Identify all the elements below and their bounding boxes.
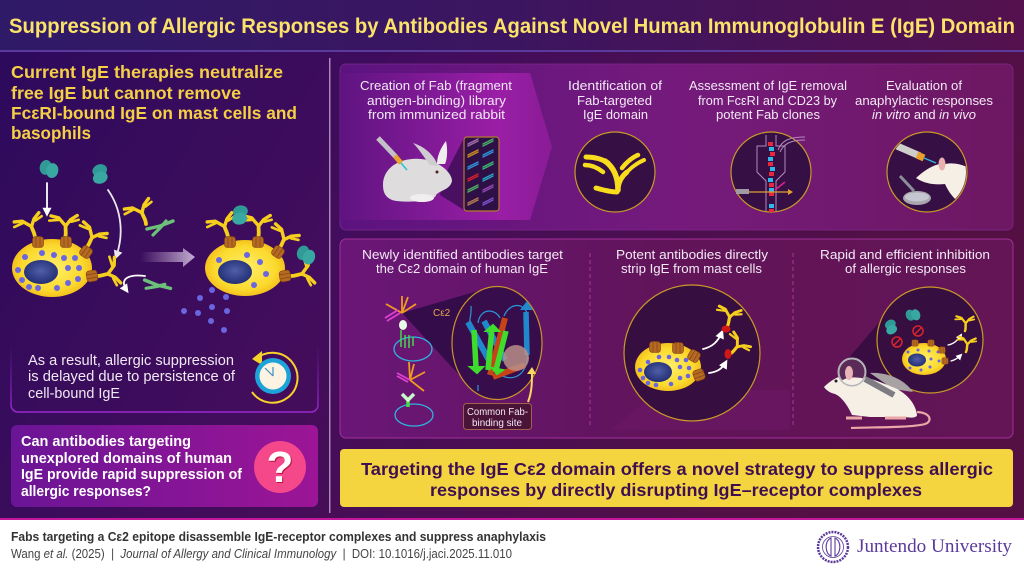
circle: inhibited response: [877, 287, 983, 393]
question text: unexplored domains of human: [21, 450, 232, 467]
heading: [616, 248, 769, 276]
step 1 text: from immunized rabbit: [368, 108, 506, 122]
panel: mechanisms: [340, 239, 1013, 438]
cone to library: [440, 138, 464, 210]
citation title: Fabs targeting a Cε2 epitope disassemble IgE-receptor complexes and suppress anaphylaxis: [11, 530, 546, 544]
free IgE with therapeutic antibody: [122, 198, 173, 235]
conclusion banner: Targeting the IgE Cε2 domain offers a novel strategy to suppress allergic: [361, 459, 993, 479]
logo: Juntendo University: Juntendo University: [857, 537, 1013, 557]
question text: [21, 433, 243, 500]
icon: mouse with magnifier: [824, 358, 930, 428]
step 2 text: [568, 79, 663, 122]
left heading: current therapies: free IgE but cannot remove: [11, 83, 241, 103]
left heading: current therapies: basophils: [11, 123, 91, 143]
icon: rabbit: [383, 141, 452, 202]
icon: question mark: [254, 441, 306, 493]
icon: IgE domain: [575, 132, 655, 212]
logo: Juntendo University: [818, 532, 1013, 562]
step 3: assessment: [689, 79, 847, 212]
result text: [28, 353, 236, 402]
icon: clock: [252, 351, 298, 403]
arrow: deflected: [124, 276, 145, 291]
conclusion banner: responses by directly disrupting IgE–receptor complexes: [430, 480, 922, 500]
step 2: identify domain: [568, 79, 663, 212]
heading: Potent antibodies directly: [616, 248, 769, 262]
step 1: Fab library: [360, 79, 513, 211]
callout: common Fab-binding site: [464, 404, 532, 430]
label: Cε2: Cε2: [433, 308, 451, 319]
diagram: mast cell before and after allergen exposure: [12, 159, 318, 333]
icon: antibody and receptor top: [385, 296, 432, 361]
icon: allergens: [38, 159, 111, 186]
conclusion banner: [340, 449, 1013, 507]
step 2 text: IgE domain: [583, 108, 648, 122]
icon: flow cell: [731, 132, 811, 212]
result text: cell-bound IgE: [28, 386, 120, 402]
column: Cε2 target: [362, 248, 564, 430]
question text: allergic responses?: [21, 483, 151, 500]
callout: common Fab-binding site: binding site: [472, 418, 522, 429]
step 1 text: [360, 79, 513, 122]
arrow: allergen misses: [108, 190, 121, 257]
library box: [464, 137, 499, 211]
column: stripping: [616, 248, 769, 421]
icon: mouse and dish: [887, 132, 970, 212]
result text: As a result, allergic suppression: [28, 353, 234, 369]
icon: question mark: ?: [267, 443, 293, 492]
panel: workflow steps: [340, 64, 1013, 230]
heading: of allergic responses: [845, 262, 966, 276]
therapeutic antibody free: [141, 273, 171, 300]
step 3 text: Assessment of IgE removal: [689, 79, 847, 93]
heading: [362, 248, 564, 276]
arrow: Fab site: [528, 372, 532, 402]
question box: [11, 425, 318, 507]
footer: [0, 518, 1024, 576]
result text: is delayed due to persistence of: [28, 369, 236, 385]
left heading: current therapies: [11, 62, 297, 143]
step 4: evaluation: [855, 79, 993, 212]
citation: Wang et al. (2025) | Journal of Allergy and Clinical Immunology | DOI: 10.1016/j.jaci.2025.11.010: [11, 547, 512, 561]
heading: Newly identified antibodies target: [362, 248, 564, 262]
step 4 text: anaphylactic responses: [855, 94, 993, 108]
chevron background: [340, 73, 552, 220]
step 2 text: Identification of: [568, 79, 663, 93]
step 3 text: [689, 79, 847, 122]
zoom cone: [840, 318, 925, 390]
question text: Can antibodies targeting: [21, 433, 191, 450]
step 1 text: Creation of Fab (fragment: [360, 79, 513, 93]
step 1 text: antigen-binding) library: [367, 94, 507, 108]
question text: IgE provide rapid suppression of: [21, 466, 243, 483]
arrow: allergen to IgE: [46, 183, 48, 214]
icon: antibody and receptor bottom: [395, 362, 433, 426]
step 3 text: potent Fab clones: [716, 108, 820, 122]
heading: [820, 248, 990, 276]
step 3 text: from FcεRI and CD23 by: [698, 94, 838, 108]
heading: Rapid and efficient inhibition: [820, 248, 990, 262]
title banner: [0, 0, 1024, 52]
left heading: current therapies: Current IgE therapies neutralize: [11, 62, 283, 82]
heading: strip IgE from mast cells: [621, 262, 762, 276]
icon: syringe: [378, 138, 407, 170]
zoom cone: [402, 286, 495, 378]
circle: mast cell stripping: [624, 285, 760, 421]
step 4 text: Evaluation of: [886, 79, 963, 93]
mast cell left: [12, 212, 121, 297]
step 4 text: [855, 79, 993, 122]
result box: [11, 345, 318, 412]
mast cell right: [205, 204, 318, 296]
step 2 text: Fab-targeted: [577, 94, 652, 108]
column: inhibition: [820, 248, 990, 428]
protein structure: [452, 286, 542, 400]
released granules: [181, 287, 230, 333]
step 4 text: in vitro and in vivo: [872, 108, 976, 122]
heading: the Cε2 domain of human IgE: [376, 262, 548, 276]
icon: question mark: ?: [268, 444, 294, 493]
arrow: progression: [140, 248, 195, 267]
left heading: current therapies: FcεRI-bound IgE on mast cells and: [11, 103, 297, 123]
callout: common Fab-binding site: Common Fab-: [467, 407, 528, 418]
